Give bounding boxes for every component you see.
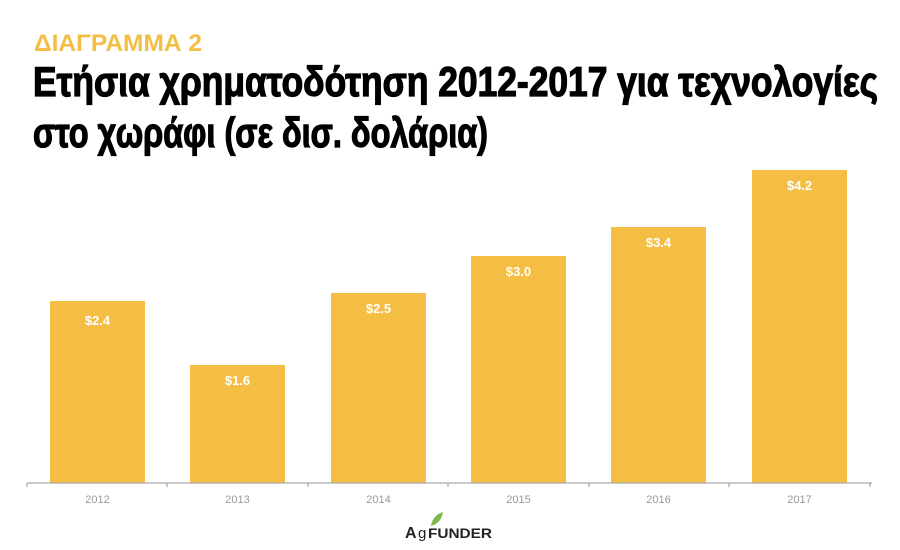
- title: [33, 58, 878, 156]
- logo: AgFunder: [405, 512, 492, 542]
- x axis labels: 2012: [85, 494, 110, 506]
- bar: 2014: [331, 293, 426, 483]
- logo: AgFunder: FUNDER: [428, 525, 492, 541]
- x axis labels: 2014: [366, 494, 391, 506]
- bar: 2012: $2.4: [85, 313, 111, 328]
- logo: AgFunder: g: [418, 525, 426, 542]
- bar: 2016: $3.4: [646, 235, 672, 250]
- x axis labels: [85, 494, 812, 506]
- x axis: [27, 483, 872, 487]
- logo: AgFunder: A: [405, 525, 417, 542]
- x axis labels: 2016: [646, 494, 671, 506]
- x axis labels: 2013: [225, 494, 250, 506]
- bar: 2015: $3.0: [506, 264, 531, 279]
- bar: 2016: [611, 227, 706, 483]
- bar: 2013: $1.6: [225, 373, 250, 388]
- bar: 2017: [752, 170, 847, 483]
- bar: 2014: $2.5: [366, 301, 391, 316]
- bar: 2012: [50, 301, 145, 483]
- bar: 2017: $4.2: [787, 178, 812, 193]
- subtitle: diagram number: ΔΙΑΓΡΑΜΜΑ 2: [34, 30, 202, 57]
- icon: sprout leaf: [431, 512, 443, 526]
- bar: 2013: [190, 365, 285, 483]
- x axis labels: 2017: [787, 494, 812, 506]
- bar: 2015: [471, 256, 566, 483]
- title: στο χωράφι (σε δισ. δολάρια): [33, 109, 488, 156]
- bar chart: [27, 170, 872, 506]
- x axis labels: 2015: [506, 494, 531, 506]
